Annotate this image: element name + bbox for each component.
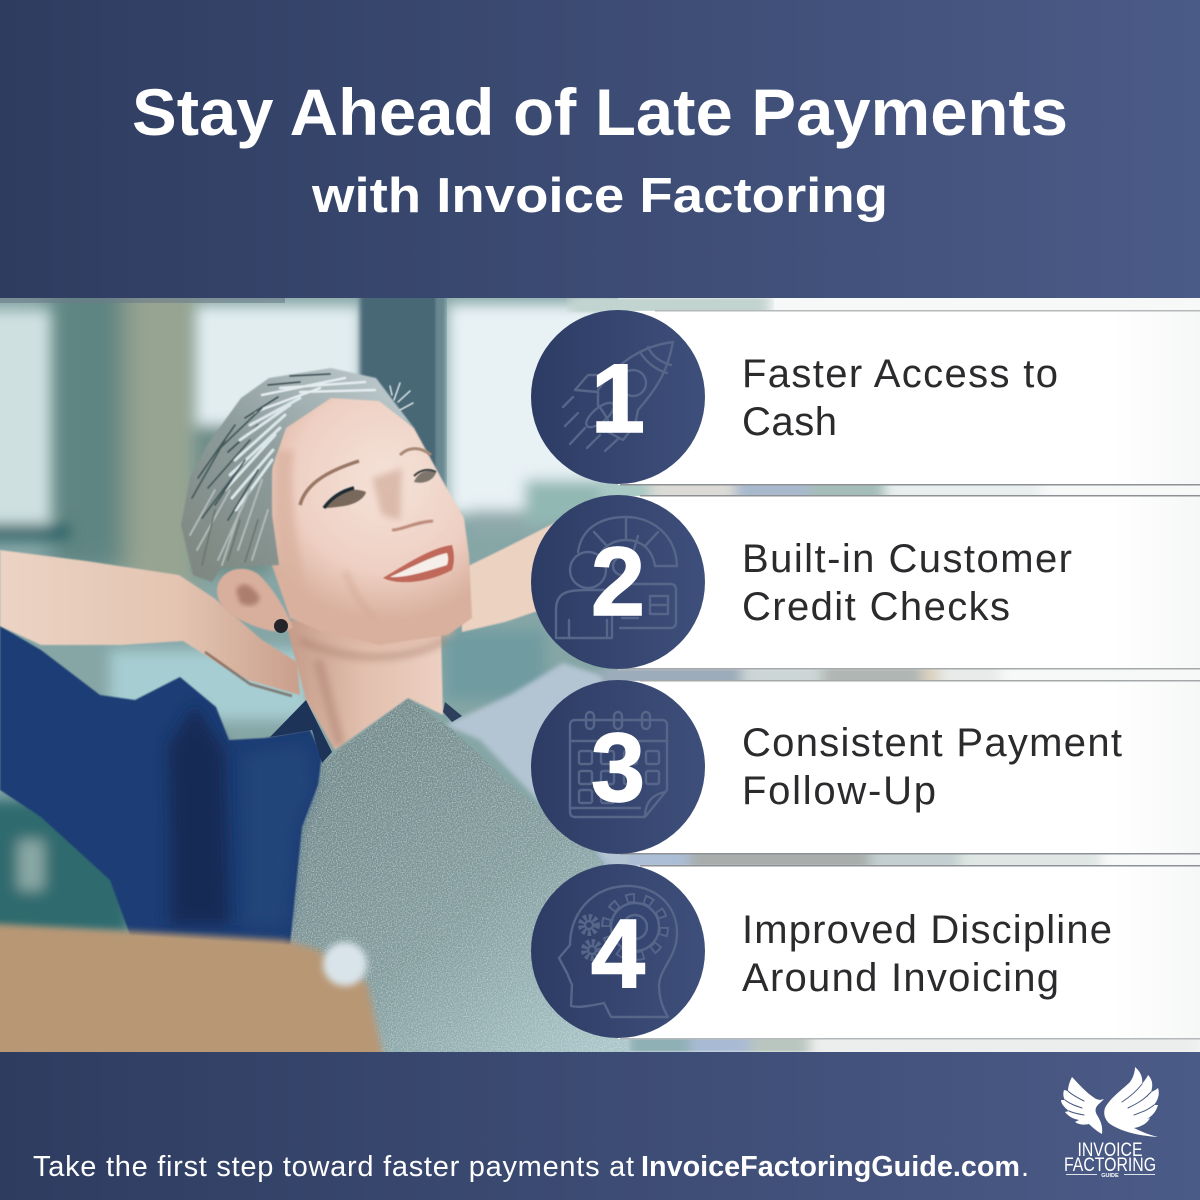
logo: Invoice Factoring Guide [1061,1067,1159,1179]
icon: rocket on numbered disc [531,310,705,484]
face shading [275,450,455,644]
grey dress [290,698,630,1060]
face [262,392,472,645]
row text: Improved Discipline [742,908,1112,952]
icon: rocket on numbered disc: 1 [591,344,645,453]
logo wing feather lines [1065,1084,1154,1115]
icon: credit score gauge, person and card: 2 [591,527,645,636]
footer call to action: InvoiceFactoringGuide.com [641,1151,1020,1183]
footer call to action: . [1021,1151,1029,1183]
icon: calendar [531,680,705,854]
footer call to action: Take the first step toward faster payments at [33,1151,634,1183]
panel: row 1 [531,310,1200,486]
logo wordmark: INVOICE [1078,1140,1142,1161]
row text: Faster Access to [742,352,1058,396]
nose [392,521,433,530]
title: Stay Ahead of Late Payments [132,75,1068,149]
neck shadows [300,640,445,745]
icon: head with gears: 4 [591,899,645,1008]
panel: row 2: Credit Checks [742,585,1010,629]
subtitle: with Invoice Factoring [311,169,888,223]
footer band [0,1052,1200,1200]
hair strands [190,374,413,565]
gaps between rows showing blurred photo [600,484,1200,1052]
header band [0,0,1200,298]
panel: row 4: Around Invoicing [742,956,1059,1000]
neck [285,620,443,750]
office background [0,270,1200,1052]
row text: Consistent Payment [742,721,1122,765]
collar [270,700,332,763]
hair [181,368,414,582]
icon: head with gears [531,864,705,1038]
smile [383,545,454,582]
earring [274,619,288,633]
icon: credit score gauge, person and card [531,495,705,669]
panel: row 2 [531,495,1200,670]
icon: eagle wings [1061,1067,1159,1137]
ear [217,569,293,631]
navy jacket [0,626,322,945]
eyes and brows [300,449,436,508]
panel: row 3: Follow-Up [742,769,936,813]
panel: row 1: Cash [742,400,837,444]
pale right shoulder [445,663,630,880]
desk and laptop foreground [0,923,386,1070]
panel: row 3 [531,680,1200,854]
row text: Built-in Customer [742,537,1072,581]
logo: Invoice Factoring Guide: GUIDE [1101,1173,1119,1179]
near arm and hand [0,550,300,696]
panel: row 4 [531,864,1200,1040]
photo: smiling woman relaxing with hands behind her head [0,270,1200,1070]
icon: calendar: 3 [591,713,645,822]
logo: Invoice Factoring Guide: FACTORING [1064,1155,1156,1176]
far arm behind head [461,522,556,633]
footer call to action [33,1151,1029,1183]
